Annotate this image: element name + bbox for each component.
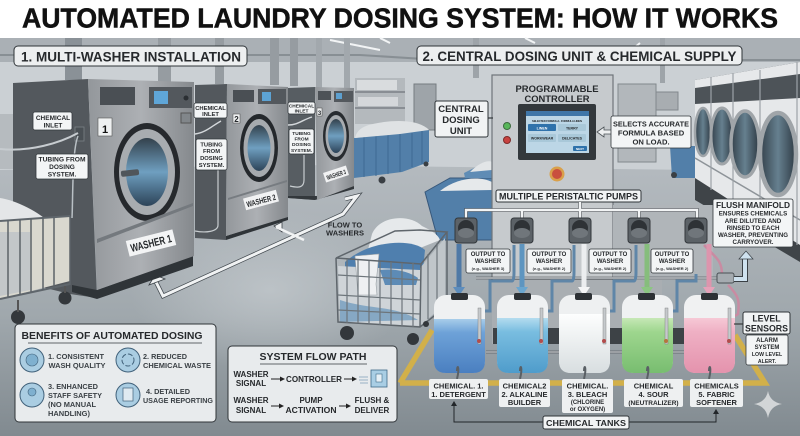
touchscreen: WORKWEAR — [531, 137, 554, 141]
chemical label 5: 5. FABRIC — [698, 390, 735, 399]
callout: flush manifold: ARE DILUTED AND — [725, 218, 782, 225]
output label 1: OUTPUT TO — [471, 252, 506, 258]
chemical tanks bracket — [451, 401, 719, 429]
chemical label 4: CHEMICAL — [634, 382, 674, 390]
tank 4: sour — [622, 293, 673, 379]
benefits heading: BENEFITS OF AUTOMATED DOSING — [22, 330, 202, 342]
flow row 1: CONTROLLER — [286, 374, 342, 384]
callout: flush manifold: RINSED TO EACH — [727, 225, 780, 232]
chemical label 5: CHEMICALS — [694, 382, 739, 390]
callout: alarm system — [746, 335, 788, 365]
pump distribution tree — [466, 202, 697, 218]
flow row 2: WASHER — [233, 396, 269, 405]
chemical label 3 — [562, 379, 613, 413]
output label 3: OUTPUT TO — [593, 252, 628, 258]
flow row 1 — [233, 370, 387, 388]
output label 4 — [651, 249, 693, 273]
callout: tubing washer 1: DOSING — [49, 164, 75, 171]
callout: selects formula: ON LOAD. — [632, 138, 670, 146]
benefit 1 — [20, 348, 106, 372]
callout: tubing washer 1: TUBING FROM — [38, 156, 86, 164]
central dosing cabinet — [492, 75, 713, 344]
output label 1: (e.g., WASHER 3) — [472, 266, 505, 271]
chemical label 3: CHEMICAL. — [567, 382, 608, 390]
callout: central dosing unit: DOSING — [442, 115, 480, 126]
output label 3: WASHER — [597, 259, 624, 265]
number tag: washer 2: 2 — [234, 115, 239, 124]
icon: sparkle — [754, 391, 782, 418]
callout: alarm system: ALARM — [756, 338, 778, 344]
washer 1 — [0, 79, 194, 299]
callout: central dosing unit — [435, 101, 493, 137]
floor safety line — [400, 330, 765, 383]
callout: alarm system: ALERT. — [758, 359, 777, 365]
chemical label 3: 3. BLEACH — [568, 390, 607, 399]
chemical label 4: 4. SOUR — [638, 390, 669, 399]
callout: level sensors: LEVEL — [752, 314, 781, 324]
callout: tubing washer 3: FROM — [294, 136, 309, 142]
number tag: washer 3: 3 — [318, 111, 322, 117]
flow row 2: FLUSH & — [355, 396, 390, 405]
pump 2 — [511, 218, 533, 243]
output label 2: WASHER — [536, 259, 563, 265]
flow to washers label: WASHERS — [326, 228, 364, 238]
flow to washers label — [326, 220, 364, 238]
panel: benefits — [15, 324, 216, 422]
callout: flush manifold — [713, 199, 793, 247]
status lights — [504, 122, 510, 144]
callout: alarm system: SYSTEM — [755, 345, 779, 351]
benefit 2: 2. REDUCED — [143, 352, 188, 361]
benefit 3: (NO MANUAL — [48, 400, 96, 409]
benefit 4: USAGE REPORTING — [143, 396, 213, 405]
flow row 2: DELIVER — [355, 406, 390, 415]
chemical label 1: 1. DETERGENT — [431, 390, 486, 399]
floor flow arrow — [149, 196, 357, 296]
touchscreen — [518, 104, 596, 160]
chemical tanks bracket: CHEMICAL TANKS — [546, 418, 626, 428]
output label 4: (e.g., WASHER 2) — [656, 266, 689, 271]
flow row 2: SIGNAL — [236, 406, 266, 415]
benefit 1: WASH QUALITY — [48, 361, 106, 370]
flow row 2 — [233, 396, 390, 415]
chemical label 1: CHEMICAL. 1. — [433, 382, 484, 390]
callout: chemical inlet washer 1 — [33, 112, 72, 130]
callout: tubing washer 2: FROM — [203, 149, 220, 155]
touchscreen: NEXT — [576, 147, 584, 151]
callout: level sensors: SENSORS — [745, 324, 788, 334]
output pipework — [476, 245, 739, 352]
tank 5: fabric softener — [684, 293, 735, 379]
controller heading — [516, 84, 598, 104]
callout: tubing washer 1: SYSTEM. — [48, 172, 76, 178]
touchscreen: DELICATES — [562, 137, 583, 141]
title: AUTOMATED LAUNDRY DOSING SYSTEM: HOW IT WORKS — [22, 2, 778, 34]
callout: flush manifold: CARRYOVER. — [732, 239, 774, 246]
callout: tubing washer 1 — [36, 154, 88, 179]
callout: tubing washer 3 — [289, 129, 314, 154]
chemical label 1 — [429, 379, 488, 399]
callout: central dosing unit: CENTRAL — [438, 104, 484, 115]
benefit 3: STAFF SAFETY — [48, 391, 102, 400]
output label 3 — [589, 249, 631, 273]
washer 2 — [195, 84, 288, 240]
pump 4 — [628, 218, 650, 243]
benefit 2 — [116, 348, 211, 372]
touchscreen: SELECTED FORMULA · FORMULA LINEN — [532, 119, 582, 123]
heading: multiple peristaltic pumps: MULTIPLE PERISTALTIC PUMPS — [499, 192, 638, 202]
benefit 4 — [116, 383, 213, 407]
chemical label 2: CHEMICAL2 — [503, 382, 546, 390]
chemical label 4: (NEUTRALIZER) — [628, 400, 679, 407]
callout: tubing washer 3: DOSING — [292, 142, 311, 148]
section heading 2: 2. CENTRAL DOSING UNIT & CHEMICAL SUPPLY — [422, 49, 736, 64]
callout: selects formula — [597, 116, 691, 148]
chemical label 4 — [624, 379, 683, 407]
callout: selects formula: FORMULA BASED — [618, 128, 685, 138]
output label 2 — [527, 249, 571, 273]
pump 3 — [569, 218, 591, 243]
section heading 1: 1. MULTI-WASHER INSTALLATION — [21, 50, 241, 64]
chemical label 3: (CHLORINE — [571, 400, 604, 406]
callout: tubing washer 3: SYSTEM. — [291, 148, 312, 154]
number tag: washer 2 — [233, 114, 240, 124]
callout: level sensors — [734, 312, 790, 334]
callout: chemical inlet washer 2 — [194, 103, 227, 118]
flow heading: SYSTEM FLOW PATH — [260, 351, 366, 363]
chemical label 3: or OXYGEN) — [570, 407, 605, 413]
output label 1: WASHER — [475, 259, 502, 265]
callout: tubing washer 2 — [196, 139, 227, 170]
callout: flush manifold: FLUSH MANIFOLD — [716, 201, 790, 210]
callout: chemical inlet washer 3 — [288, 102, 315, 114]
left laundry cart — [0, 198, 72, 324]
benefit 1: 1. CONSISTENT — [48, 352, 104, 361]
name plate: washer 3: WASHER 3 — [326, 169, 347, 182]
flow row 1: WASHER — [233, 370, 269, 379]
flow to washers label: FLOW TO — [328, 220, 362, 230]
chemical label 5: SOFTENER — [696, 398, 737, 407]
benefit 4: 4. DETAILED — [146, 387, 191, 396]
feed lines pump to tank — [453, 244, 715, 296]
controller heading: CONTROLLER — [524, 94, 590, 104]
flow row 1: SIGNAL — [236, 379, 266, 388]
number tag: washer 1: 1 — [102, 124, 108, 136]
washer 3 — [288, 87, 354, 200]
touchscreen: TERRY — [566, 126, 579, 130]
benefit 3 — [20, 382, 102, 418]
output label 2: OUTPUT TO — [532, 252, 567, 258]
pump 5 — [685, 218, 707, 243]
benefit 3: 3. ENHANCED — [48, 382, 99, 391]
callout: chemical inlet washer 3: CHEMICAL — [289, 104, 314, 110]
callout: tubing washer 2: DOSING — [200, 156, 223, 162]
name plate: washer 2: WASHER 2 — [246, 193, 277, 209]
chemical label 5 — [690, 379, 743, 407]
callout: flush manifold: ENSURES CHEMICALS — [719, 210, 787, 218]
callout: tubing washer 2: TUBING — [200, 142, 223, 148]
flush manifold valve and outlet arrow — [717, 251, 753, 283]
number tag: washer 1 — [98, 118, 112, 136]
chemical label 2 — [499, 379, 550, 407]
callout: chemical inlet washer 1: CHEMICAL — [36, 115, 70, 122]
output label 3: (e.g., WASHER 2) — [594, 266, 627, 271]
output label 4: WASHER — [659, 259, 686, 265]
callout: tubing washer 2: SYSTEM. — [199, 163, 225, 169]
chemical label 2: BUILDER — [508, 398, 542, 407]
output label 4: OUTPUT TO — [655, 252, 690, 258]
bins in background — [354, 121, 696, 240]
callout: central dosing unit: UNIT — [450, 126, 472, 137]
tank 3: bleach — [559, 293, 610, 379]
tank 2: alkaline builder — [497, 293, 548, 379]
tank 1: detergent — [434, 293, 485, 379]
panel: system flow path — [228, 346, 397, 422]
flow row 2: PUMP — [299, 396, 323, 405]
callout: flush manifold: WASHER, PREVENTING — [718, 232, 788, 239]
callout: alarm system: LOW LEVEL — [752, 352, 783, 358]
output label 1 — [466, 249, 510, 273]
callout: chemical inlet washer 1: INLET — [44, 122, 62, 130]
callout: selects formula: SELECTS ACCURATE — [613, 120, 689, 128]
callout: tubing washer 3: TUBING — [292, 131, 311, 137]
benefit 3: HANDLING) — [48, 409, 91, 418]
pump 1 — [455, 218, 477, 243]
benefit 2: CHEMICAL WASTE — [143, 361, 211, 370]
touchscreen: LINEN — [537, 126, 548, 130]
stop button — [550, 166, 564, 182]
chemical label 2: 2. ALKALINE — [502, 390, 547, 399]
output label 2: (e.g., WASHER 2) — [533, 266, 566, 271]
callout: chemical inlet washer 2: CHEMICAL — [195, 106, 226, 112]
callout: chemical inlet washer 3: INLET — [295, 108, 308, 114]
name plate: washer 1: WASHER 1 — [129, 233, 173, 255]
right washers row — [695, 62, 800, 262]
callout: chemical inlet washer 2: INLET — [202, 112, 219, 118]
laundry cart centre — [336, 218, 447, 345]
controller heading: PROGRAMMABLE — [516, 84, 598, 94]
flow row 2: ACTIVATION — [286, 406, 337, 415]
